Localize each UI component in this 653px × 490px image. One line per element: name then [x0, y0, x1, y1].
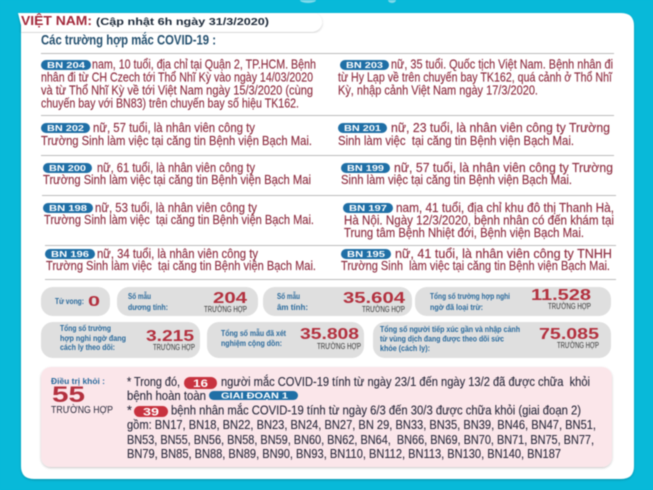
case BN 197 [343, 201, 614, 240]
phase 1 text: bệnh hoàn toàn [127, 389, 206, 403]
stat: negative samples: âm tính: [277, 302, 308, 312]
stat: community tests: Tổng số mẫu đã xét [221, 328, 286, 338]
recovered total: 55 [52, 382, 85, 407]
stat: contacts monitored: TRƯỜNG HỢP [557, 341, 599, 350]
stat: positive samples: Số mẫu [128, 291, 151, 301]
case BN 203: Kỳ, nhập cảnh Việt Nam ngày 17/3/2020. [338, 84, 538, 98]
case BN 202 [41, 121, 312, 148]
stat: suspected cases excluded [415, 287, 611, 316]
case BN 202: BN 202 [47, 123, 84, 133]
recovered total: TRƯỜNG HỢP [51, 403, 113, 416]
case BN 204: và từ Thổ Nhĩ Kỳ về tới Việt Nam ngày 15/3/2020 (cùng [41, 84, 313, 98]
case BN 201: nữ, 23 tuổi, là nhân viên công ty Trường [391, 121, 610, 135]
stat: community tests: nghiệm cộng dồn: [221, 338, 282, 348]
title bar: (Cập nhật 6h ngày 31/3/2020) [96, 16, 269, 28]
case BN 201: Sinh làm việc tại căng tin Bệnh viện Bạch Mai. [338, 134, 574, 148]
case BN 203: BN 203 [346, 60, 383, 70]
case BN 200: BN 200 [49, 163, 86, 173]
stat: negative samples: Số mẫu [277, 291, 300, 301]
recovered total [51, 376, 113, 416]
phase 2 text: 39 [143, 406, 159, 418]
stat: contacts monitored: Tổng số người tiếp xúc gần và nhập cảnh [380, 324, 520, 334]
case BN 199: Sinh làm việc tại căng tin Bệnh viện Bạch Mai. [341, 173, 572, 187]
stat: deaths: 0 [88, 293, 100, 310]
stat: contacts monitored: khỏe (cách ly): [380, 343, 430, 353]
phase 1 text: 16 [193, 378, 208, 390]
stat: positive samples: TRƯỜNG HỢP [204, 305, 247, 314]
stat: negative samples: 35.604 [343, 290, 405, 307]
recovered total: Điều trị khỏi : [51, 376, 105, 386]
stat: deaths [41, 287, 110, 316]
case BN 196: nữ, 34 tuổi, là nhân viên công ty [97, 247, 259, 261]
case BN 200: nữ, 61 tuổi, là nhân viên công ty [97, 161, 256, 175]
case BN 204 [41, 58, 316, 110]
stat: positive samples [117, 287, 258, 316]
stat: deaths: Tử vong: [55, 296, 84, 306]
stat: negative samples: TRƯỜNG HỢP [362, 305, 405, 314]
case BN 198: Trường Sinh làm việc tại căng tin Bệnh viện Bạch Mai. [44, 213, 314, 227]
phase 2 text [127, 402, 596, 461]
stat: suspected in isolation: hợp nghi ngờ đang [60, 333, 126, 343]
stat: suspected in isolation: cách ly theo dõi: [60, 342, 115, 352]
stat: community tests: TRƯỜNG HỢP [317, 342, 361, 351]
case BN 202: Trường Sinh làm việc tại căng tin Bệnh viện Bạch Mai. [41, 134, 312, 148]
phase 2 text: * [127, 404, 132, 418]
case BN 201: BN 201 [344, 123, 381, 133]
stat: suspected cases excluded: ngờ đã loại trừ: [430, 302, 483, 312]
stat: suspected cases excluded: Tổng số trường hợp nghi [430, 291, 510, 301]
case BN 199: BN 199 [347, 163, 384, 173]
decorative top spots [300, 0, 396, 3]
phase 2 text: BN79, BN85, BN88, BN89, BN90, BN93, BN110, BN112, BN113, BN130, BN140, BN187 [127, 447, 561, 461]
phase 2 text: gồm: BN17, BN18, BN22, BN23, BN24, BN27, BN 29, BN33, BN35, BN39, BN46, BN47, BN51, [127, 418, 596, 432]
case BN 204: chuyến bay với BN83) trên chuyến bay số hiệu TK162. [41, 96, 299, 110]
case BN 203: từ Hy Lạp về trên chuyến bay TK162, quá cảnh ở Thổ Nhĩ [338, 70, 612, 84]
title bar: VIỆT NAM: [21, 13, 92, 28]
stat: suspected in isolation: 3.215 [146, 328, 194, 345]
stat: suspected in isolation: Tổng số trường [60, 323, 111, 333]
phase 1 text: * Trong đó, [127, 375, 180, 389]
case BN 203 [338, 58, 613, 98]
stat: contacts monitored: 75.085 [539, 326, 599, 343]
case BN 197: Hà Nội. Ngày 12/3/2020, bệnh nhân có đến khám tại [344, 214, 614, 228]
case BN 196: BN 196 [51, 249, 89, 259]
case BN 195: Trường Sinh làm việc tại căng tin Bệnh viện Bạch Mai. [341, 259, 610, 273]
stat: suspected in isolation: TRƯỜNG HỢP [153, 343, 195, 352]
stat: community tests [207, 322, 364, 358]
case BN 197: Trung tâm Bệnh Nhiệt đới, Bệnh viện Bạch Mai. [344, 226, 584, 240]
stat: suspected in isolation [41, 322, 200, 358]
case BN 196: Trường Sinh làm việc tại căng tin Bệnh viện Bạch Mai. [46, 259, 316, 273]
case BN 198: BN 198 [49, 203, 87, 213]
case BN 195: nữ, 41 tuổi, là nhân viên công ty TNHH [395, 247, 612, 261]
case BN 195: BN 195 [347, 249, 385, 259]
case BN 204: nam, 10 tuổi, địa chỉ tại Quận 2, TP.HCM. Bệnh [92, 58, 316, 72]
case BN 204: BN 204 [47, 60, 85, 70]
case BN 204: nhân đi từ CH Czech tới Thổ Nhĩ Kỳ vào ngày 14/03/2020 [41, 70, 313, 84]
case BN 198 [43, 201, 314, 227]
case BN 201 [338, 121, 610, 148]
case BN 202: nữ, 57 tuổi, là nhân viên công ty [93, 121, 256, 135]
stat: suspected cases excluded: TRƯỜNG HỢP [548, 302, 591, 311]
phase 1 text: người mắc COVID-19 tính từ ngày 23/1 đến ngày 13/2 đã được chữa khỏi [221, 374, 590, 389]
phase 1 text [127, 374, 590, 403]
case BN 198: nữ, 53 tuổi, là nhân viên công ty [95, 201, 258, 215]
stat: suspected cases excluded: 11.528 [531, 287, 591, 304]
case BN 197: nam, 41 tuổi, địa chỉ khu đô thị Thanh Hà, [396, 201, 614, 215]
case BN 197: BN 197 [349, 203, 387, 213]
stat: negative samples [263, 287, 412, 316]
title bar [18, 13, 322, 32]
phase 2 text: bệnh nhân mắc COVID-19 tính từ ngày 6/3 đến 30/3 được chữa khỏi (giai đoạn 2) [171, 402, 581, 418]
stat: contacts monitored: từ vùng dịch đang được theo dõi sức [380, 334, 504, 344]
stat: positive samples: dương tính: [128, 302, 168, 312]
case BN 200: Trường Sinh làm việc tại căng tin Bệnh viện Bạch Mai [43, 173, 311, 187]
case BN 199 [341, 161, 613, 187]
case BN 196 [45, 247, 316, 273]
case BN 199: nữ, 57 tuổi, là nhân viên công ty Trường [394, 161, 613, 175]
heading: cases: Các trường hợp mắc COVID-19 : [41, 32, 216, 48]
stat: contacts monitored [373, 322, 611, 358]
stat: positive samples: 204 [213, 290, 247, 307]
case BN 203: nữ, 35 tuổi. Quốc tịch Việt Nam. Bệnh nhân đi [391, 58, 613, 72]
case BN 195 [341, 247, 612, 273]
case BN 200 [43, 161, 311, 187]
stat: community tests: 35.808 [300, 326, 359, 343]
panel: recovered patients [41, 367, 612, 467]
phase 2 text: BN53, BN55, BN56, BN58, BN59, BN60, BN62, BN64, BN66, BN69, BN70, BN71, BN75, BN77, [127, 433, 594, 447]
phase 1 text: GIAI ĐOẠN 1 [221, 390, 288, 400]
